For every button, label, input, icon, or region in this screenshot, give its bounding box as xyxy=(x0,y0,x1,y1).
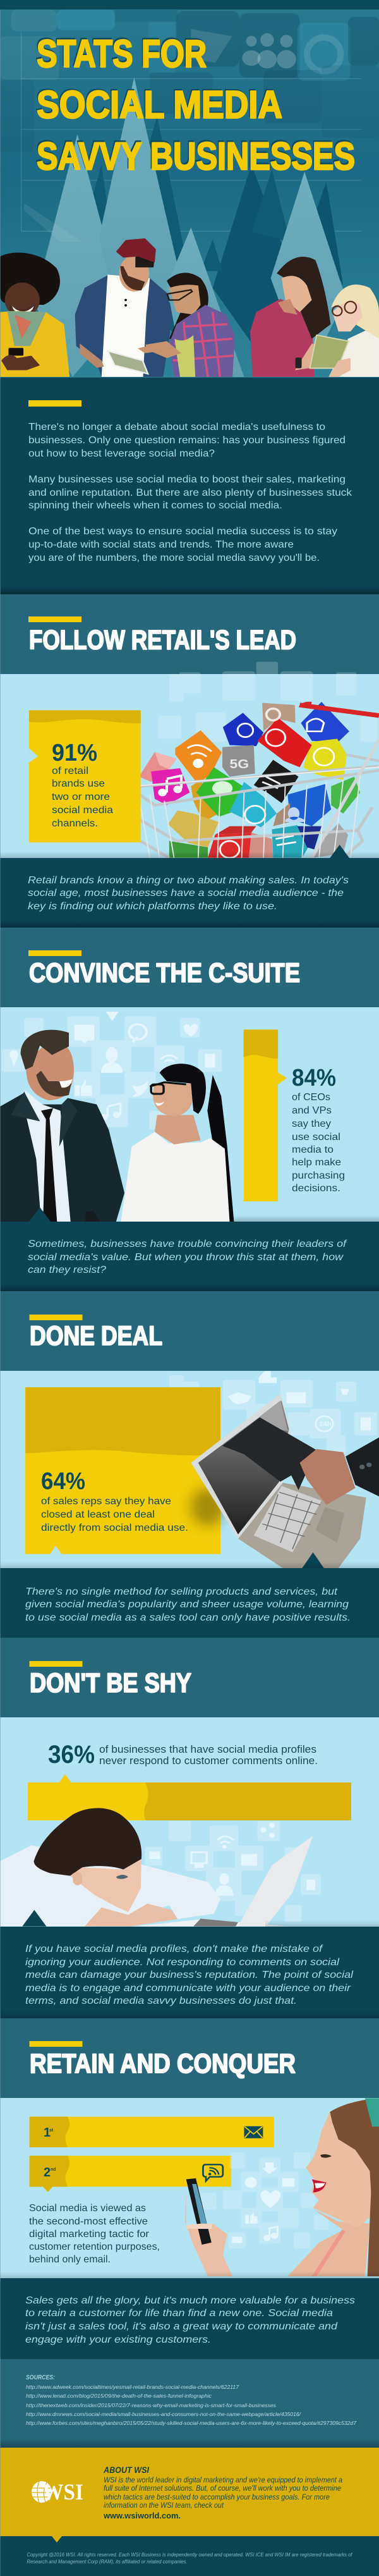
bar: 2nd place social media xyxy=(30,2156,231,2192)
panel: follow retail's lead heading xyxy=(0,594,379,674)
text block: about: which tactics are best-suited to accomplish your business goals. For more xyxy=(104,2494,330,2501)
cart handle and wires xyxy=(299,705,379,716)
stat text: 64 percent: closed at least one deal xyxy=(41,1509,155,1520)
stat text: 84 percent: say they xyxy=(292,1119,331,1129)
photo: laptop with handshake xyxy=(191,1394,379,1568)
text block: to retain a customer for life than find a new one. Social media xyxy=(25,2308,333,2319)
panel: retail stat xyxy=(0,662,379,858)
stat bar: 36 percent xyxy=(28,1774,351,1820)
panel: retain and conquer heading xyxy=(0,2018,379,2098)
stat text: 36 percent xyxy=(48,1741,318,1769)
panel: header xyxy=(0,0,379,377)
text block: retention stat: behind only email. xyxy=(29,2254,111,2265)
woman in plaid shirt with glasses xyxy=(145,273,235,377)
text block: about: ABOUT WSI xyxy=(103,2465,150,2475)
stat text: 91 percent xyxy=(52,740,113,829)
blonde woman with glasses xyxy=(310,285,379,377)
text block: about: WSI is the world leader in digital marketing and we're equipped to implement a xyxy=(104,2477,342,2484)
text block: engage with your existing customers. xyxy=(25,2334,211,2345)
stat text: 84 percent: of CEOs xyxy=(292,1092,330,1103)
text block xyxy=(25,1944,353,2006)
text block: There's no single method for selling products and services, but xyxy=(25,1586,338,1597)
stat bar: 84 percent xyxy=(244,1029,287,1201)
text block: media can damage your business's reputation. The point of social xyxy=(25,1970,353,1980)
panel: copyright footer: Copyright @2016 WSI. All rights reserved. Each WSI Business is independently owned and operated. WSI ICE and WSI IM are registered trademarks of xyxy=(27,2552,352,2558)
panel: sources: http://www.adweek.com/socialtimes/yesmail-retail-brands-social-media-channels/622117 xyxy=(26,2384,239,2390)
text block: ignoring your audience. Not responding to comments on social xyxy=(25,1957,339,1968)
text block: intro paragraphs: you are of the numbers, the more social media savvy you'll be. xyxy=(28,553,320,563)
text block: given social media's popularity and sheer usage volume, learning xyxy=(25,1599,349,1610)
icon: faded app tiles xyxy=(145,1821,321,1922)
photo: smiling woman in profile xyxy=(287,2098,379,2276)
text: 1st and 2nd rank labels: 1 xyxy=(44,2126,51,2140)
text: 1st and 2nd rank labels: 2 xyxy=(44,2166,51,2180)
heading: FOLLOW RETAIL'S LEAD xyxy=(29,625,296,655)
grid lines xyxy=(21,33,361,231)
photo: bored woman with laptop xyxy=(0,1808,313,1927)
panel: c-suite stat xyxy=(0,1007,379,1222)
stat text: 91 percent: two or more xyxy=(52,792,110,802)
photo: smiling businesswoman xyxy=(85,1064,234,1222)
people photo group xyxy=(0,238,379,377)
panel: done deal heading xyxy=(0,1291,379,1371)
stat text: 91 percent: channels. xyxy=(52,818,98,829)
stat text: 84 percent: purchasing xyxy=(292,1170,345,1181)
text block: key is finding out which platforms they like to use. xyxy=(28,901,277,912)
icon: rss speech bubble xyxy=(203,2164,223,2181)
text block: social age, most businesses have a social media audience - the xyxy=(28,888,344,899)
shopping cart full of app cubes xyxy=(128,702,379,858)
heading: DON'T BE SHY xyxy=(30,1668,191,1698)
text block: retention stat: customer retention purposes, xyxy=(29,2242,160,2252)
text block xyxy=(28,1239,347,1275)
text block: to use social media as a sales tool can only have positive results. xyxy=(25,1612,351,1623)
stat text: 36 percent: of businesses that have social media profiles xyxy=(99,1743,316,1755)
text block: intro paragraphs: businesses. Only one question remains: has your business figured xyxy=(28,435,346,446)
heading: DONE DEAL xyxy=(30,1321,162,1351)
stat text: 84 percent: decisions. xyxy=(292,1183,340,1194)
stat text: 91 percent: brands use xyxy=(52,778,105,789)
text block: Retail brands know a thing or two about making sales. In today's xyxy=(28,875,349,886)
panel: done deal stat: 24h xyxy=(319,1421,332,1428)
panel: don't be shy stat xyxy=(0,1717,379,1927)
text block: retention stat: the second-most effective xyxy=(29,2216,148,2227)
stat text: 84 percent xyxy=(292,1065,345,1194)
mountains xyxy=(24,77,346,377)
panel: done deal stat xyxy=(0,1371,379,1568)
logo: WSI: WSI xyxy=(42,2479,83,2505)
panel: sources: http://www.lenati.com/blog/2015/09/the-death-of-the-sales-funnel-infographic xyxy=(26,2393,212,2399)
stat text: 36 percent: never respond to customer comments online. xyxy=(99,1755,318,1767)
text block: about xyxy=(103,2465,342,2520)
text block: about: information on the WSI team, check out xyxy=(104,2502,224,2510)
stat text: 64 percent: 64% xyxy=(41,1468,85,1495)
stat text: 84 percent: use social xyxy=(292,1132,340,1143)
text: 1st and 2nd rank labels: nd xyxy=(51,2168,56,2172)
panel: copyright footer xyxy=(0,2536,379,2576)
icon glyphs on cubes xyxy=(188,719,334,858)
stat text: 84 percent: 84% xyxy=(292,1065,336,1091)
bar: 1st place email xyxy=(30,2117,274,2147)
panel: sources: http://www.forbes.com/sites/meghanbiro/2015/05/22/study-skilled-social-media-users-are-6x-more-likely-to-exceed-quota/#297309c532d7 xyxy=(26,2420,356,2426)
title: STATS FOR xyxy=(35,30,206,73)
panel: about WSI xyxy=(0,2448,379,2536)
photo: smiling businessman xyxy=(0,1030,124,1222)
title: SOCIAL MEDIA xyxy=(37,83,282,126)
woman in pink shirt xyxy=(250,257,330,377)
panel: retail commentary xyxy=(0,845,379,928)
panel: c-suite commentary xyxy=(0,1215,379,1291)
panel: retain and conquer chart xyxy=(0,2098,379,2278)
stat text: 64 percent: of sales reps say they have xyxy=(41,1496,171,1507)
stat text: 91 percent: social media xyxy=(52,805,113,816)
text block xyxy=(25,2295,355,2345)
heading: CONVINCE THE C-SUITE xyxy=(29,958,300,988)
stat text: 84 percent: help make xyxy=(292,1157,341,1168)
panel: copyright footer: Research and Management Corp (RAM), its affiliated or related companies. xyxy=(27,2559,187,2565)
stat box: 91 percent xyxy=(29,710,141,842)
text: 1st and 2nd rank labels: st xyxy=(49,2128,54,2133)
text block xyxy=(25,1586,351,1623)
text block: isn't just a sales tool, it's also a great way to communicate and xyxy=(25,2321,338,2332)
panel: done deal commentary xyxy=(0,1562,379,1638)
text block: retention stat xyxy=(29,2203,160,2265)
text block: can they resist? xyxy=(28,1265,106,1275)
text block: intro paragraphs: There's no longer a debate about social media's usefulness to xyxy=(28,422,325,432)
icon: faded app tiles xyxy=(2,1016,222,1130)
man in blue cardigan xyxy=(75,238,172,377)
title xyxy=(35,30,355,178)
panel: don't be shy heading xyxy=(0,1638,379,1717)
text block: about: full suite of Internet solutions. But, of course, we'll work with you to determine xyxy=(104,2485,341,2493)
stat box: 64 percent xyxy=(25,1387,225,1554)
panel: sources: http://thenextweb.com/insider/2015/07/22/7-reasons-why-email-marketing-is-smart-for-small-businesses xyxy=(26,2402,277,2408)
stat text: 84 percent: and VPs xyxy=(292,1105,332,1116)
panel: sources xyxy=(0,2359,379,2448)
text block: retention stat: digital marketing tactic for xyxy=(29,2229,150,2240)
photo: phone in hand xyxy=(185,2178,232,2276)
woman in yellow cardigan xyxy=(0,253,69,377)
text block: intro paragraphs: One of the best ways to ensure social media success is to stay xyxy=(28,526,337,537)
text block: intro paragraphs: up-to-date with social stats and trends. The more aware xyxy=(28,539,294,550)
icon: faded app tiles xyxy=(201,2152,328,2248)
text: 1st and 2nd rank labels xyxy=(44,2126,56,2180)
panel: convince the c-suite heading xyxy=(0,928,379,1007)
text block: intro paragraphs: out how to best leverage social media? xyxy=(28,448,215,459)
panel: sources: http://www.dmnews.com/social-media/small-businesses-and-consumers-not-on-the-same-webpage/article/435016/ xyxy=(26,2411,302,2417)
stat text: 64 percent xyxy=(41,1468,188,1533)
text block: intro paragraphs: spinning their wheels when it comes to social media. xyxy=(28,500,282,511)
text block: Sometimes, businesses have trouble convincing their leaders of xyxy=(28,1239,347,1249)
text block: intro paragraphs: and online reputation. But there are also plenty of businesses stuck xyxy=(28,488,352,498)
text block: retention stat: Social media is viewed as xyxy=(29,2203,146,2214)
icon: faded app tiles xyxy=(169,1375,377,1454)
text block: intro paragraphs xyxy=(28,422,352,563)
text block: social media's value. But when you throw this stat at them, how xyxy=(28,1252,344,1263)
text block: intro paragraphs: Many businesses use social media to boost their sales, marketing xyxy=(28,474,346,485)
icon: faded social media tiles xyxy=(0,9,379,152)
text block: If you have social media profiles, don't make the mistake of xyxy=(25,1944,323,1954)
stat text: 84 percent: media to xyxy=(292,1144,334,1155)
stat text: 91 percent: 91% xyxy=(52,740,97,766)
text block: Sales gets all the glory, but it's much more valuable for a business xyxy=(25,2295,355,2306)
shopping cart full of app cubes: 5G xyxy=(230,757,249,771)
panel: introduction xyxy=(0,377,379,594)
title: SOCIAL MEDIA xyxy=(35,82,282,125)
stat text: 91 percent: of retail xyxy=(52,766,88,776)
title: STATS FOR xyxy=(37,32,207,75)
icon: envelope xyxy=(244,2126,263,2138)
panel: sources: SOURCES: xyxy=(26,2374,55,2381)
text block: terms, and social media savvy businesses do just that. xyxy=(25,1996,297,2006)
stat text: 64 percent: directly from social media use. xyxy=(41,1523,188,1533)
icon: faded app tiles xyxy=(159,662,377,742)
panel: don't be shy commentary xyxy=(0,1920,379,2018)
panel: retain commentary xyxy=(0,2271,379,2359)
heading: RETAIN AND CONQUER xyxy=(30,2049,296,2079)
text block: media is to engage and communicate with your audience on their xyxy=(25,1983,351,1994)
text block: about: www.wsiworld.com. xyxy=(103,2511,181,2520)
text block xyxy=(28,875,349,912)
stat text: 36 percent: 36% xyxy=(48,1741,95,1769)
